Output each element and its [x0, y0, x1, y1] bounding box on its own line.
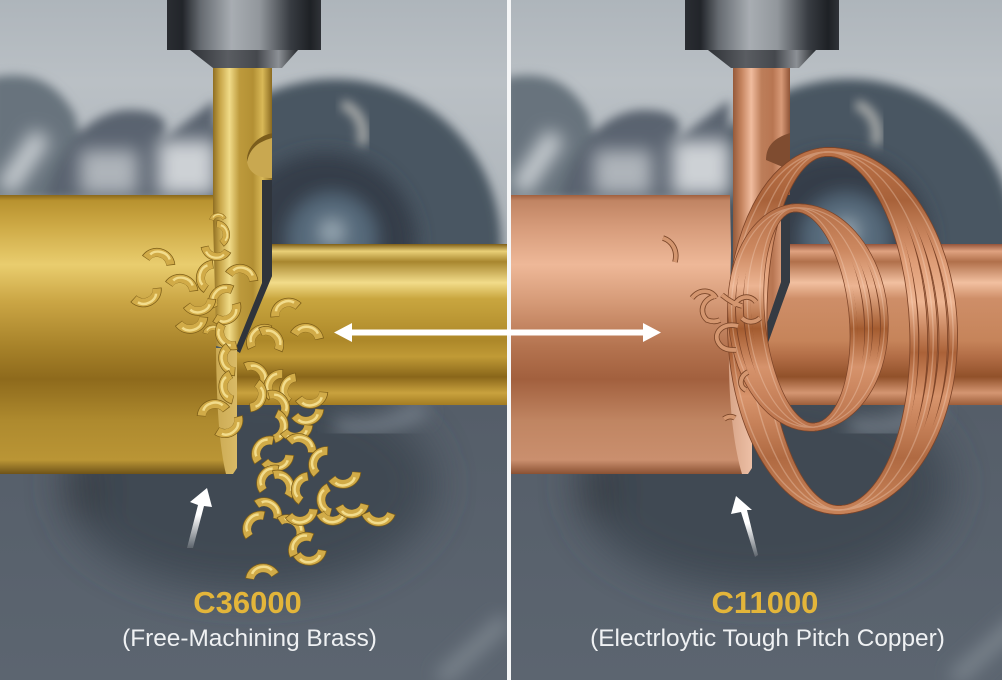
heading: C36000: C36000	[193, 585, 302, 620]
copper cutting tool	[733, 68, 790, 345]
panel: C36000 free-machining brass	[0, 0, 507, 680]
label: C36000 (Free-Machining Brass)	[122, 585, 377, 652]
cutting tool holder	[685, 0, 839, 68]
arrow: pointing to copper workpiece	[731, 496, 758, 557]
arrow: pointing to brass workpiece	[187, 488, 212, 548]
brass cutting tool	[213, 68, 272, 353]
label: C11000 (Electrolytic Tough Pitch Copper)	[590, 585, 945, 652]
small curled copper chips	[663, 238, 760, 419]
copper coil: long continuous wire (large)	[732, 152, 953, 510]
blurred machine background (brass)	[0, 0, 507, 680]
subtitle: Electrolytic Tough Pitch Copper: (Electrloytic Tough Pitch Copper)	[590, 625, 945, 652]
panel: C11000 electrolytic tough pitch copper	[504, 0, 1002, 680]
subtitle: Free-Machining Brass: (Free-Machining Brass)	[122, 625, 377, 652]
large copper workpiece	[511, 195, 752, 474]
copper coil: long continuous wire (small)	[732, 208, 884, 427]
double-headed comparison arrow	[334, 323, 661, 342]
cutting tool holder	[167, 0, 321, 68]
large brass workpiece	[0, 195, 237, 474]
small turned copper bar	[752, 244, 1002, 405]
heading: C11000: C11000	[712, 585, 818, 620]
blurred machine background (copper)	[504, 0, 1002, 680]
small turned brass bar	[237, 244, 507, 405]
panel divider	[507, 0, 511, 680]
brass chips: short broken segments	[133, 214, 391, 579]
